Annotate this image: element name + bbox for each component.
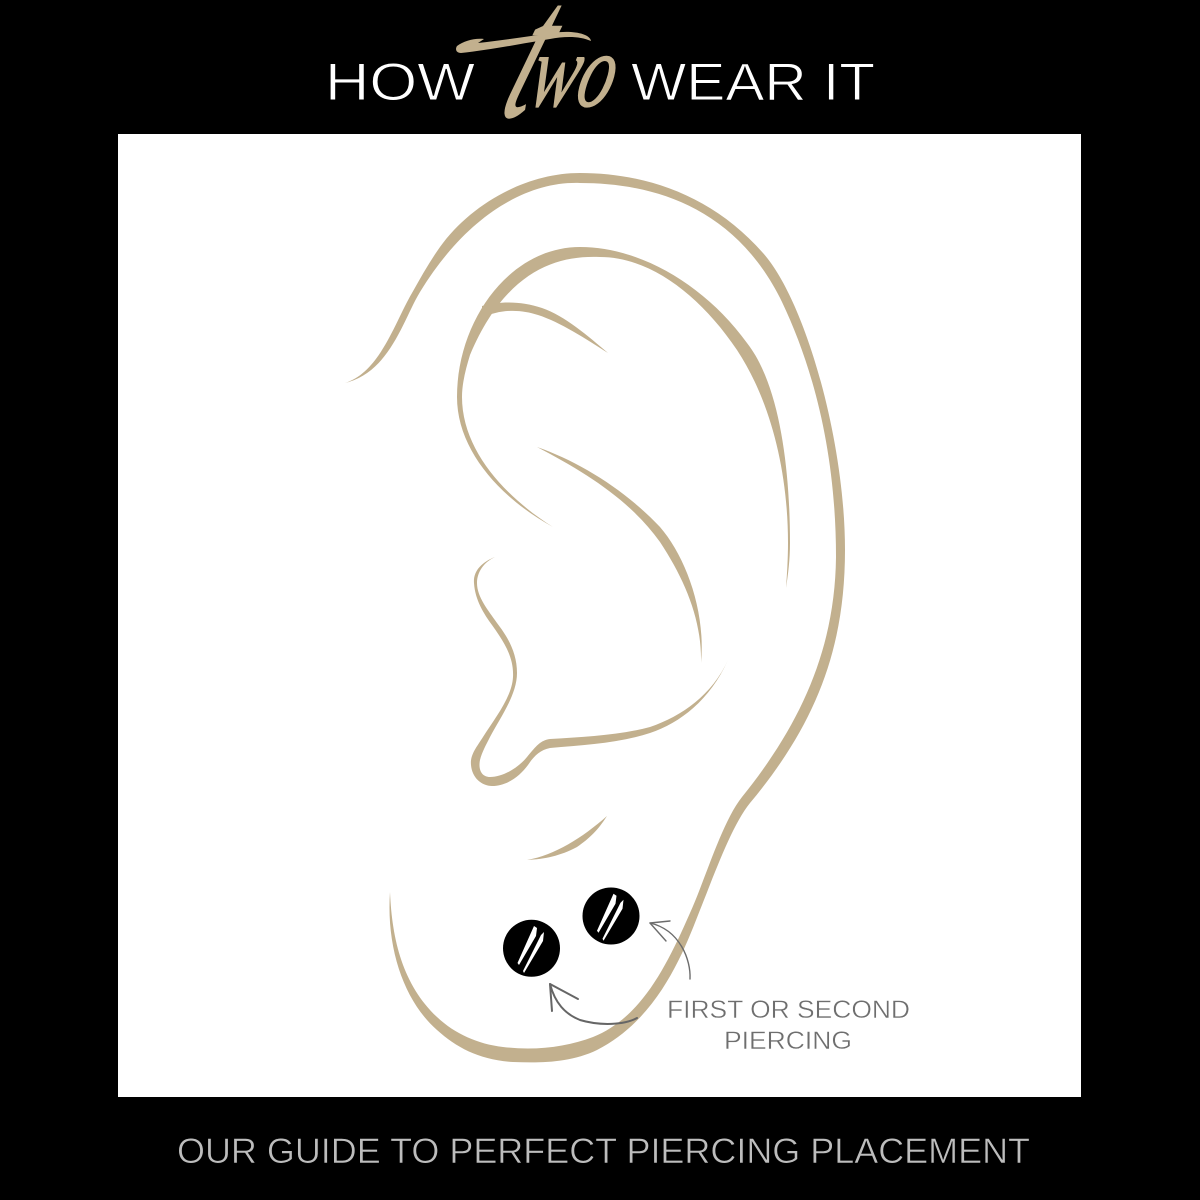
white panel with ear illustration (118, 134, 1081, 1097)
piercing stud: upper (582, 888, 640, 944)
upper fold branch (482, 302, 608, 353)
title (325, 0, 875, 159)
title: script word two (456, 0, 633, 159)
callout label (667, 996, 910, 1055)
piercing stud: lower (503, 920, 560, 977)
footer subtitle: OUR GUIDE TO PERFECT PIERCING PLACEMENT (177, 1132, 1030, 1171)
inner helix fold (457, 247, 790, 588)
outer ear contour (345, 173, 845, 1062)
title: WEAR IT: WEAR IT (631, 53, 875, 112)
ear illustration (345, 173, 845, 1062)
script t crossbar flourish (456, 32, 591, 53)
callout label: PIERCING (724, 1027, 852, 1055)
arrow to upper stud (650, 921, 690, 979)
arrow to lower stud (550, 984, 637, 1024)
earlobe crease (527, 816, 607, 860)
antihelix curve (537, 447, 702, 663)
title: script word two: wo (519, 12, 633, 129)
tragus and concha contour (471, 557, 728, 786)
callout label: FIRST OR SECOND (667, 996, 910, 1024)
title: HOW: HOW (325, 53, 475, 112)
